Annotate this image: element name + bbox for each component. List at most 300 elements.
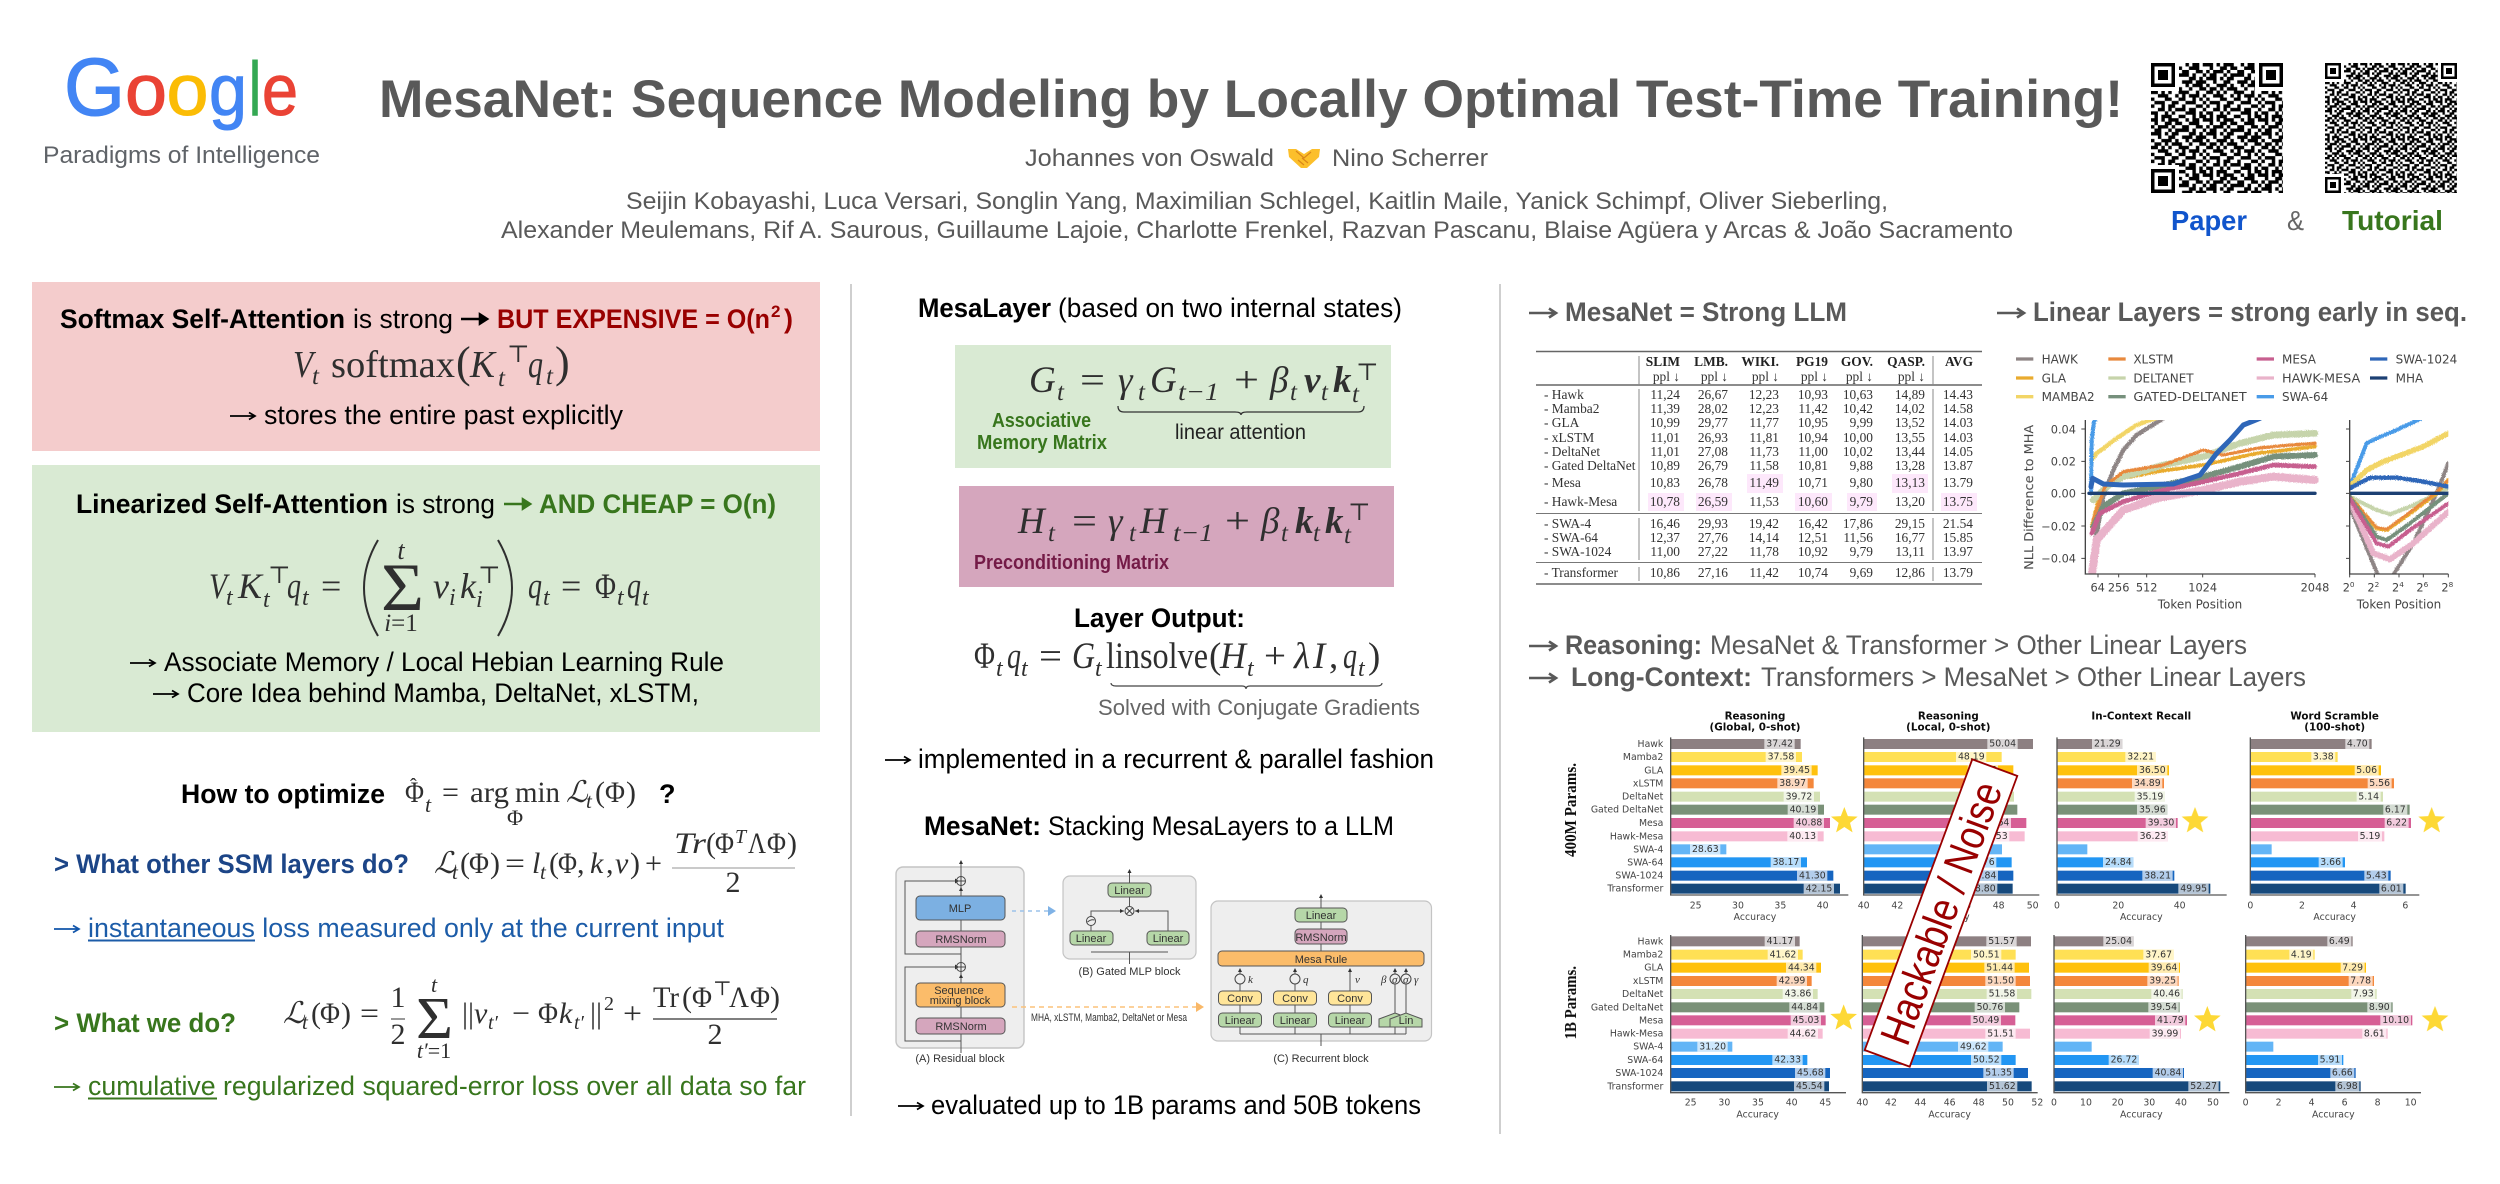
formula: layer output: λ: [1293, 636, 1310, 677]
chart: reasoning global 1B: 31.20: [1699, 1041, 1726, 1052]
chart: word scramble 400M: 5.06: [2356, 765, 2377, 776]
table values: 12,51: [1798, 530, 1828, 545]
chart: full sequence curves: −0.04: [2041, 552, 2076, 566]
chart: reasoning global 1B: 42.99: [1779, 976, 1805, 987]
table header: QASP.: [1887, 354, 1925, 369]
heading: linear layers strong early: Linear Layers = strong early in seq.: [2033, 297, 2467, 327]
formula: argmin: Φ: [405, 776, 424, 809]
table header: ppl ↓: [1653, 369, 1680, 384]
formula: cumulative loss: 2: [390, 1018, 406, 1051]
formula: argmin: ℒ: [566, 776, 589, 809]
table values: 29,77: [1698, 415, 1728, 430]
legend: GATED-DELTANET: [2133, 390, 2247, 404]
formula: G update: G: [1150, 360, 1177, 401]
model labels: 400M: Gated DeltaNet: [1591, 805, 1664, 816]
formula: linear attention: i=1: [384, 610, 418, 637]
table values: 10,95: [1798, 415, 1828, 430]
table values: 12,23: [1749, 387, 1779, 402]
chart: reasoning global 400M: 41.30: [1799, 870, 1826, 881]
formula: cumulative loss: ⊤: [713, 978, 732, 1000]
chart: reasoning local 1B: 44: [1914, 1098, 1926, 1109]
chart: early sequence curves: 2: [2441, 581, 2449, 595]
formula: layer output: t: [1247, 656, 1255, 682]
heading: softmax: [60, 302, 793, 334]
formula: softmax attention: t: [498, 365, 506, 392]
chart: full sequence curves: [2022, 417, 2329, 611]
chart: reasoning global 400M: 38.17: [1773, 857, 1799, 868]
note: cumulative loss: cumulative regularized squared-error loss over all data so far: [88, 1071, 806, 1101]
table values: 9,99: [1850, 415, 1873, 430]
formula: softmax attention: V: [293, 344, 316, 386]
table values: 13,20: [1895, 494, 1925, 509]
table values: 9,79: [1850, 494, 1873, 509]
lead authors: Johannes von Oswald: [1025, 145, 1274, 172]
chart: word scramble 400M: 3.66: [2320, 857, 2341, 868]
legend: MHA: [2396, 371, 2424, 385]
table values: 10,60: [1798, 494, 1828, 509]
chart: word scramble 400M: 6.22: [2386, 818, 2407, 829]
notes: associative memory, core idea: [130, 647, 724, 708]
chart: reasoning global 1B: 43.86: [1785, 989, 1811, 1000]
formula: argmin: Φ: [507, 805, 523, 830]
chart: word scramble 1B: 8.61: [2364, 1028, 2385, 1039]
table header: ppl ↓: [1701, 369, 1728, 384]
panel: recurrent block: σ: [1403, 974, 1409, 986]
formula: instantaneous loss: ): [787, 827, 797, 860]
chart: word scramble 1B: [2243, 935, 2421, 1121]
formula: layer output: t: [1021, 656, 1029, 682]
formula: cumulative loss: Φ: [538, 997, 558, 1030]
chart: in-context recall 400M: In-Context Recall: [2091, 710, 2191, 722]
table values: 13.79: [1943, 565, 1973, 580]
formula: argmin: ˆ: [410, 775, 417, 797]
lead authors: [1025, 145, 1488, 172]
table values: 10,63: [1843, 387, 1873, 402]
formula: argmin: arg: [470, 776, 509, 809]
chart: reasoning local 1B: 50.76: [1977, 1002, 2003, 1013]
formula: cumulative loss: t: [302, 1010, 309, 1034]
table header: LMB.: [1694, 354, 1728, 369]
formula: G update: G: [1029, 360, 1056, 401]
table values: 13,13: [1895, 475, 1925, 490]
notes: associative memory, core idea: Core Idea behind Mamba, DeltaNet, xLSTM,: [187, 678, 699, 708]
chart: word scramble 400M: [2247, 710, 2419, 923]
chart: in-context recall 400M: 34.89: [2134, 778, 2161, 789]
table values: 11,81: [1749, 430, 1779, 445]
column dividers: [851, 284, 1500, 1134]
chart: word scramble 400M: 6.01: [2381, 883, 2402, 894]
table values: 11,73: [1749, 444, 1779, 459]
formula: linear attention: t: [642, 585, 650, 611]
panel: recurrent block: Mesa Rule: [1295, 954, 1347, 966]
formula: instantaneous loss: (: [460, 847, 470, 880]
formula: cumulative loss: t: [431, 972, 438, 997]
legend: HAWK: [2042, 352, 2079, 366]
table values: 11,58: [1749, 458, 1779, 473]
heading: MesaNet stacking: [924, 811, 1394, 841]
panel: preconditioning matrix: [959, 486, 1394, 587]
row label: 1B params: 1B Params.: [1561, 966, 1580, 1039]
formula: linear attention: t: [263, 587, 271, 613]
chart: word scramble 400M: 0: [2247, 900, 2253, 911]
QR code: paper: [2151, 63, 2283, 193]
formula: H update: =: [1072, 501, 1097, 542]
table values: 14.58: [1943, 401, 1973, 416]
table values: 10,83: [1650, 475, 1680, 490]
table values: 13,44: [1895, 444, 1925, 459]
formula: G update: t: [1290, 379, 1298, 406]
chart: in-context recall 400M: 35.19: [2137, 791, 2163, 802]
formula: cumulative loss: ): [341, 997, 351, 1030]
heading: linearized: Linearized Self-Attention: [76, 489, 388, 519]
model labels: 400M: xLSTM: [1633, 778, 1663, 789]
table values: 15.85: [1943, 530, 1973, 545]
chart: word scramble 1B: 6.98: [2337, 1081, 2358, 1092]
arrow: MLP to gated MLP: [1012, 906, 1056, 916]
heading: long-context: Transformers > MesaNet > Other Linear Layers: [1761, 662, 2306, 692]
table header: ppl ↓: [1898, 369, 1925, 384]
table values: 13,55: [1895, 430, 1925, 445]
formula: instantaneous loss: Φ: [767, 827, 786, 860]
panel: linearized self-attention: [32, 465, 820, 732]
chart: reasoning local 1B: 49.62: [1960, 1041, 1987, 1052]
table row labels: - Hawk-Mesa: [1544, 494, 1617, 509]
table values: 13.79: [1943, 475, 1973, 490]
heading: MesaNet stacking: MesaNet:: [924, 811, 1041, 841]
formula: instantaneous loss: ,: [577, 847, 584, 880]
panel: softmax self-attention: [32, 282, 820, 451]
chart: word scramble 400M: 3.38: [2313, 752, 2334, 763]
chart: full sequence curves: 2048: [2301, 581, 2329, 595]
formula: linear attention: i: [476, 587, 483, 613]
formula: linear attention: K: [237, 566, 264, 606]
chart: reasoning local 400M: 46: [1959, 900, 1971, 911]
table row labels: - SWA-4: [1544, 516, 1592, 531]
table values: 21.54: [1943, 516, 1973, 531]
formula: cumulative loss: +: [623, 997, 642, 1030]
chart: reasoning global 400M: Accuracy: [1734, 912, 1777, 923]
question: how to optimize: ?: [659, 779, 676, 809]
title: MesaNet: Sequence Modeling by Locally Optimal Test-Time Training!: [379, 70, 2123, 129]
formula: instantaneous loss: Λ: [748, 827, 766, 860]
chart: reasoning global 1B: 25: [1685, 1098, 1697, 1109]
formula: G update: [1029, 360, 1379, 408]
table values: 14.03: [1943, 415, 1973, 430]
chart: in-context recall 400M: 38.21: [2144, 870, 2171, 881]
diagram: MesaNet architecture: [896, 860, 1432, 1065]
panel: recurrent block: Linear: [1335, 1015, 1366, 1027]
table values: 10,92: [1798, 544, 1828, 559]
co-authors: Alexander Meulemans, Rif A. Saurous, Guillaume Lajoie, Charlotte Frenkel, Razvan Pascanu, Blaise Agüera y Arcas & João Sacramento: [501, 217, 2013, 244]
heading: linearized: is strong: [396, 489, 495, 519]
chart: reasoning local 400M: (Local, 0-shot): [1906, 721, 1990, 733]
formula: linear attention: t: [302, 585, 310, 611]
formula: softmax attention: softmax: [331, 344, 455, 386]
arrow: sequence mixing to recurrent: MHA, xLSTM, Mamba2, DeltaNet or Mesa: [1031, 1012, 1188, 1024]
table values: 13,11: [1895, 544, 1925, 559]
formula: instantaneous loss: ,: [606, 847, 614, 880]
chart: word scramble 1B: 4: [2309, 1098, 2315, 1109]
panel: recurrent block: Conv: [1227, 993, 1253, 1005]
panel: residual block: mixing block: [930, 995, 991, 1007]
model labels: 400M: SWA-1024: [1615, 871, 1663, 882]
table row labels: - Hawk: [1544, 387, 1584, 402]
chart: reasoning global 1B: 30: [1718, 1098, 1730, 1109]
chart: reasoning global 400M: Reasoning: [1725, 710, 1785, 722]
model labels: 400M: Mesa: [1639, 818, 1663, 829]
panel: recurrent block: β: [1380, 974, 1387, 986]
table values: 10,99: [1650, 415, 1680, 430]
chart: reasoning local 400M: 48.76: [1968, 857, 1995, 868]
formula: linear attention: i: [449, 585, 456, 611]
table values: 9,80: [1850, 475, 1873, 490]
formula: layer output: t: [1095, 656, 1103, 682]
panel: recurrent block: Conv: [1282, 993, 1308, 1005]
panel: recurrent block: k: [1248, 974, 1254, 986]
chart: reasoning global 400M: 39.72: [1786, 791, 1812, 802]
chart: reasoning global 400M: 40.19: [1790, 804, 1816, 815]
formula: instantaneous loss: Φ: [715, 827, 734, 860]
formula: argmin: [405, 775, 636, 830]
model labels: 400M: Transformer: [1606, 884, 1663, 895]
heading: long-context: [1529, 662, 2306, 692]
table values: 11,01: [1650, 430, 1680, 445]
heading: softmax: BUT EXPENSIVE = O(n: [497, 304, 770, 334]
formula: argmin: (: [595, 776, 605, 809]
formula: cumulative loss: [283, 972, 780, 1063]
formula: cumulative loss: Tr: [653, 981, 679, 1014]
chart: in-context recall 1B: 10: [2080, 1098, 2092, 1109]
note: stores past: stores the entire past explicitly: [264, 400, 623, 430]
table values: 17,86: [1843, 516, 1873, 531]
chart: reasoning local 1B: 46: [1944, 1098, 1956, 1109]
legend: MESA: [2282, 352, 2317, 366]
chart: reasoning local 400M: 48.91: [1970, 791, 1997, 802]
chart: full sequence curves: 512: [2136, 581, 2157, 595]
formula: cumulative loss: 2: [604, 993, 614, 1015]
formula: cumulative loss: Φ: [692, 981, 712, 1014]
formula: layer output: H: [1219, 636, 1248, 677]
heading: softmax: ): [784, 304, 793, 334]
chart: reasoning local 1B: 50.51: [1973, 949, 2000, 960]
table header: GOV.: [1841, 354, 1873, 369]
heading: MesaLayer: MesaLayer: [918, 293, 1051, 323]
arrow: sequence mixing to recurrent: [1012, 1002, 1204, 1024]
formula: linear attention: k: [460, 566, 477, 606]
chart: in-context recall 1B: 52.27: [2190, 1081, 2217, 1092]
panel: residual block: Sequence: [934, 985, 984, 997]
panel: recurrent block: [1211, 894, 1432, 1065]
formula: cumulative loss: (: [311, 997, 321, 1030]
question: how to optimize: How to optimize: [181, 779, 385, 809]
table values: 10,42: [1843, 401, 1873, 416]
chart: reasoning local 1B: 51.44: [1986, 962, 2013, 973]
panel: residual block: RMSNorm: [935, 1021, 987, 1033]
panel: recurrent block: q: [1303, 974, 1309, 986]
formula: G update: v: [1304, 360, 1321, 401]
model labels: 1B: SWA-64: [1627, 1055, 1663, 1066]
formula: instantaneous loss: T: [735, 826, 748, 848]
formula: G update: γ: [1118, 360, 1134, 401]
chart: in-context recall 1B: 0: [2051, 1098, 2057, 1109]
team name: Paradigms of Intelligence: Paradigms of Intelligence: [43, 142, 320, 169]
chart: reasoning local 400M: 48: [1993, 900, 2005, 911]
chart: in-context recall 400M: 32.21: [2127, 752, 2154, 763]
formula: instantaneous loss: (: [706, 827, 716, 860]
table values: 26,67: [1698, 387, 1728, 402]
chart: in-context recall 1B: [2051, 935, 2229, 1121]
Google logo: o: [166, 51, 208, 131]
formula: layer output: G: [1072, 636, 1095, 677]
chart: reasoning local 400M: 44: [1925, 900, 1937, 911]
chart: early sequence curves: 2: [2343, 581, 2350, 595]
table values: 10,78: [1650, 494, 1680, 509]
panel: recurrent block: Linear: [1306, 910, 1337, 922]
formula: cumulative loss: Λ: [729, 981, 749, 1014]
chart: in-context recall 1B: 39.99: [2152, 1028, 2178, 1039]
formula: cumulative loss: −: [512, 997, 530, 1030]
chart: word scramble 1B: 7.29: [2342, 962, 2363, 973]
chart: word scramble 1B: 5.91: [2320, 1055, 2340, 1066]
table row labels: - DeltaNet: [1544, 444, 1600, 459]
chart: reasoning local 1B: Accuracy: [1928, 1110, 1971, 1121]
label: preconditioning matrix: Preconditioning Matrix: [974, 552, 1169, 574]
table values: 10,71: [1798, 475, 1828, 490]
legend: HAWK-MESA: [2282, 371, 2361, 385]
model labels: 400M: [1591, 739, 1664, 895]
table values: 16,46: [1650, 516, 1680, 531]
formula: layer output: Φ: [974, 636, 995, 677]
formula: G update: t: [1321, 379, 1329, 406]
formula: instantaneous loss: Φ: [469, 847, 489, 880]
table values: 10,81: [1798, 458, 1828, 473]
model labels: 1B: Hawk-Mesa: [1610, 1029, 1663, 1040]
label: associative memory matrix: [977, 410, 1107, 454]
table values: 28,02: [1698, 401, 1728, 416]
table values: 16,77: [1895, 530, 1925, 545]
label: associative memory matrix: Memory Matrix: [977, 432, 1107, 454]
formula: cumulative loss: k: [559, 997, 573, 1030]
formula: cumulative loss: =: [360, 997, 379, 1030]
block: what we do: [54, 972, 780, 1063]
chart: word scramble 1B: 0: [2243, 1098, 2249, 1109]
model labels: 1B: Mamba2: [1623, 950, 1663, 961]
formula: G update: t: [1057, 379, 1065, 406]
table values: 11,53: [1749, 494, 1779, 509]
chart: early sequence curves: Token Position: [2356, 597, 2441, 611]
chart: reasoning local 1B: 51.57: [1988, 936, 2015, 947]
icons: gold stars marking best models: [1830, 807, 2448, 1031]
formula: H update: [1017, 500, 1371, 549]
table values: 11,78: [1749, 544, 1779, 559]
formula: instantaneous loss: 2: [726, 866, 740, 899]
chart: word scramble 1B: 6.49: [2329, 936, 2350, 947]
chart: reasoning global 400M: 42.15: [1806, 883, 1832, 894]
chart: word scramble 400M: 6.17: [2385, 804, 2406, 815]
formula: softmax attention: ): [555, 338, 570, 387]
chart: reasoning global 1B: 44.34: [1788, 962, 1815, 973]
chart: word scramble 400M: 4.70: [2347, 739, 2368, 750]
chart: word scramble 1B: 2: [2276, 1098, 2282, 1109]
chart: in-context recall 1B: 50: [2207, 1098, 2219, 1109]
formula: linear attention: v: [433, 566, 449, 606]
chart: reasoning local 1B: 42: [1885, 1098, 1897, 1109]
table values: 13.97: [1943, 544, 1973, 559]
model labels: 1B: Hawk: [1638, 936, 1664, 947]
formula: layer output: =: [1039, 636, 1062, 677]
table values: [1650, 387, 1973, 580]
legend: DELTANET: [2133, 371, 2194, 385]
table values: 14,89: [1895, 387, 1925, 402]
chart: reasoning global 1B: 40: [1786, 1098, 1798, 1109]
formula: linear attention: [209, 536, 650, 637]
formula: cumulative loss: v: [474, 997, 488, 1030]
table values: 10,86: [1650, 565, 1680, 580]
chart: in-context recall 1B: Accuracy: [2120, 1110, 2163, 1121]
formula: instantaneous loss: Tr: [674, 827, 706, 860]
formula: linear attention: q: [287, 566, 301, 606]
table values: 14,02: [1895, 401, 1925, 416]
heading: softmax: Softmax Self-Attention: [60, 304, 345, 334]
legend: GLA: [2042, 371, 2067, 385]
panel: recurrent block: γ: [1414, 974, 1419, 986]
table values: 9,69: [1850, 565, 1873, 580]
chart: reasoning local 1B: 51.62: [1989, 1081, 2016, 1092]
formula: H update: H: [1017, 501, 1047, 542]
chart: word scramble 1B: 8.90: [2369, 1002, 2390, 1013]
chart: full sequence curves: 0.02: [2051, 455, 2076, 469]
formula: instantaneous loss: [434, 826, 797, 899]
block: what other SSM layers do: > What other SSM layers do?: [54, 849, 409, 879]
panel: gated MLP block: (B) Gated MLP block: [1079, 966, 1181, 978]
chart: word scramble 1B: Accuracy: [2312, 1110, 2355, 1121]
table row labels: - Transformer: [1544, 565, 1619, 580]
note: instantaneous loss: instantaneous loss measured only at the current input: [88, 913, 724, 943]
chart: reasoning local 400M: 40: [1858, 900, 1870, 911]
legend: [2016, 352, 2457, 404]
table values: 12,23: [1749, 401, 1779, 416]
formula: H update: γ: [1108, 501, 1124, 542]
formula: instantaneous loss: (: [549, 847, 559, 880]
formula: cumulative loss: Σ: [416, 985, 453, 1051]
legend: SWA-64: [2282, 390, 2328, 404]
formula: H update: +: [1225, 501, 1250, 542]
chart: reasoning local 400M: 49.53: [1981, 831, 2008, 842]
formula: argmin: Φ: [605, 776, 625, 809]
chart: full sequence curves: −0.02: [2041, 519, 2076, 533]
chart: reasoning local 1B: 51.58: [1989, 989, 2015, 1000]
chart: in-context recall 400M: 36.50: [2139, 765, 2166, 776]
model labels: 1B: xLSTM: [1633, 976, 1663, 987]
chart: in-context recall 1B: 30: [2143, 1098, 2155, 1109]
chart: reasoning local 1B: 50: [2002, 1098, 2014, 1109]
heading: layer output: Layer Output:: [1074, 603, 1245, 633]
formula: cumulative loss: (: [682, 981, 692, 1014]
model labels: 400M: SWA-64: [1627, 857, 1663, 868]
formula: argmin: min: [515, 776, 560, 809]
heading: softmax: 2: [771, 302, 780, 321]
formula: softmax attention: (: [456, 338, 471, 387]
formula: softmax attention: K: [469, 344, 497, 386]
formula: layer output: q: [1343, 636, 1357, 677]
chart: reasoning global 400M: 35: [1774, 900, 1786, 911]
panel: recurrent block: Conv: [1337, 993, 1363, 1005]
heading: linearized: AND CHEAP = O(n): [539, 489, 776, 519]
model labels: 400M: DeltaNet: [1622, 792, 1664, 803]
chart: full sequence curves: NLL Difference to MHA: [2022, 424, 2036, 570]
table values: 11,24: [1650, 387, 1680, 402]
chart: word scramble 1B: 6.66: [2332, 1068, 2353, 1079]
